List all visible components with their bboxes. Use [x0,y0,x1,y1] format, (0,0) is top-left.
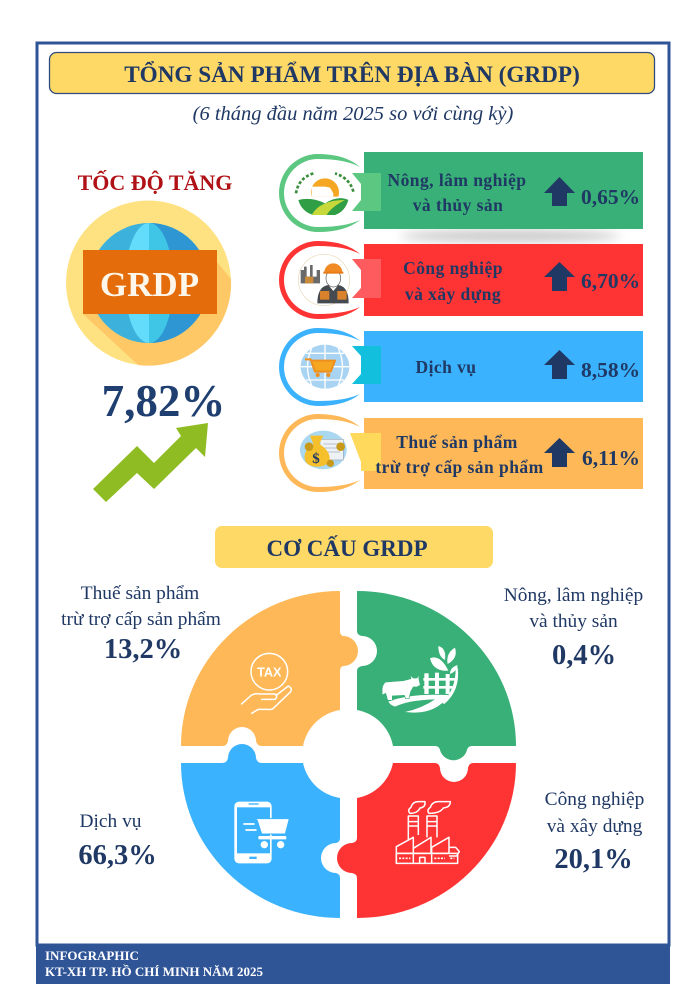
title banner: TỔNG SẢN PHẨM TRÊN ĐỊA BÀN (GRDP) [124,61,580,88]
row: agriculture [279,152,643,232]
label: taxes share: 13,2% [104,634,182,665]
label: agriculture share [504,585,643,671]
label: taxes share [61,583,221,665]
arrow up [544,438,575,467]
label: services share: Dịch vụ [80,811,142,832]
icon: GRDP globe badge [66,200,231,366]
row: industry and construction: 6,70% [581,269,640,293]
ring icon: taxes: $ [312,451,320,467]
row: product taxes [279,414,643,492]
label: agriculture share: Nông, lâm nghiệp [504,585,643,606]
label: agriculture share: 0,4% [552,640,616,671]
arrow up [544,350,575,379]
row: industry and construction [279,241,643,319]
label: taxes share: Thuế sản phẩm [81,583,199,604]
heading: growth rate: TỐC ĐỘ TĂNG [78,170,232,195]
icon: tax hand [242,653,291,713]
row: agriculture: và thủy sản [413,195,503,215]
label: industry share: 20,1% [554,844,633,875]
ring icon: industry [279,241,360,319]
row: agriculture: Nông, lâm nghiệp [388,170,526,190]
heading: GRDP structure [215,526,493,568]
label: industry share: và xây dựng [547,816,643,837]
arrow up [544,262,575,291]
title banner [50,52,654,94]
icon: tax hand: TAX [257,666,282,680]
puzzle piece: industry [337,763,516,918]
row: industry and construction: Công nghiệp [403,258,503,278]
subtitle: (6 tháng đầu năm 2025 so với cùng kỳ) [193,103,514,125]
puzzle piece: taxes [181,591,358,746]
growth value: 7,82% [102,376,225,426]
arrow up [544,177,575,206]
row: services: Dịch vụ [415,357,477,377]
footer: KT-XH TP. HỒ CHÍ MINH NĂM 2025 [45,964,264,979]
label: industry share [545,789,644,875]
row: product taxes: trừ trợ cấp sản phẩm [375,457,544,477]
label: services share [78,811,157,871]
ring icon: taxes [279,414,360,492]
label: taxes share: trừ trợ cấp sản phẩm [61,609,221,630]
icon: GRDP globe badge: GRDP [100,265,199,304]
puzzle piece: agriculture [357,591,516,760]
heading: GRDP structure: CƠ CẤU GRDP [266,535,428,561]
icon: rising arrow [93,423,208,502]
row: industry and construction: và xây dựng [405,284,501,304]
puzzle piece: services [181,744,340,918]
footer [36,944,670,984]
row: product taxes: 6,11% [582,446,640,470]
icon: phone and cart [234,802,289,863]
footer: INFOGRAPHIC [45,948,139,963]
row: services [279,328,643,406]
row: agriculture: 0,65% [581,185,640,209]
label: industry share: Công nghiệp [545,789,644,810]
row: product taxes: Thuế sản phẩm [396,432,518,452]
icon: factory [396,802,459,863]
puzzle chart [181,591,516,918]
label: services share: 66,3% [78,840,157,871]
row: services: 8,58% [581,358,640,382]
label: agriculture share: và thủy sản [529,611,618,632]
ring icon: agriculture [279,154,360,232]
icon: cow and field [382,646,458,713]
shadow under first row [400,230,620,242]
ring icon: services [279,328,360,406]
